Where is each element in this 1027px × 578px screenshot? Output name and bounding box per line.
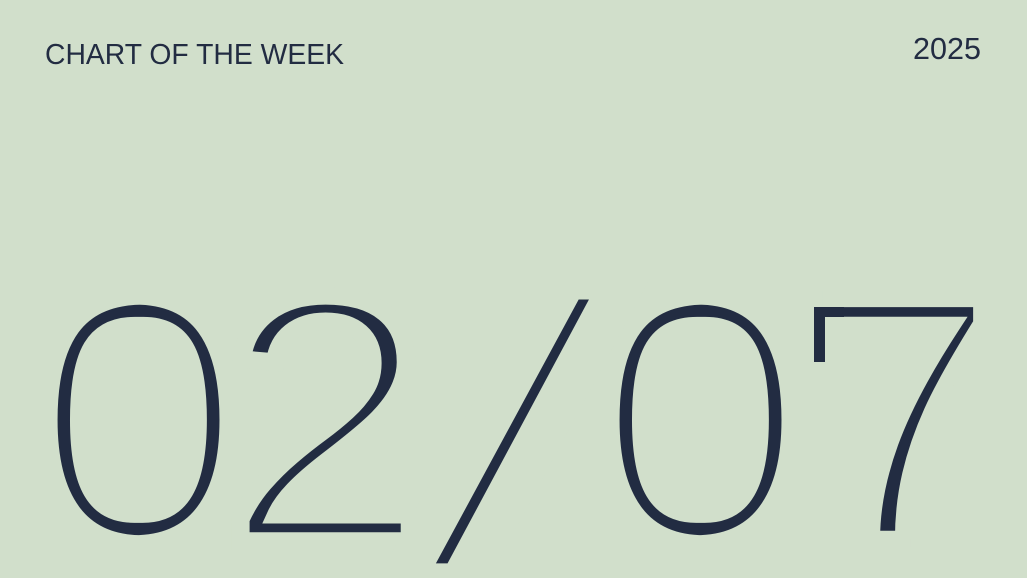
heading: chart of the week: CHART OF THE WEEK	[45, 39, 345, 71]
large date: 02/07	[32, 217, 998, 578]
year label: 2025	[913, 31, 981, 66]
